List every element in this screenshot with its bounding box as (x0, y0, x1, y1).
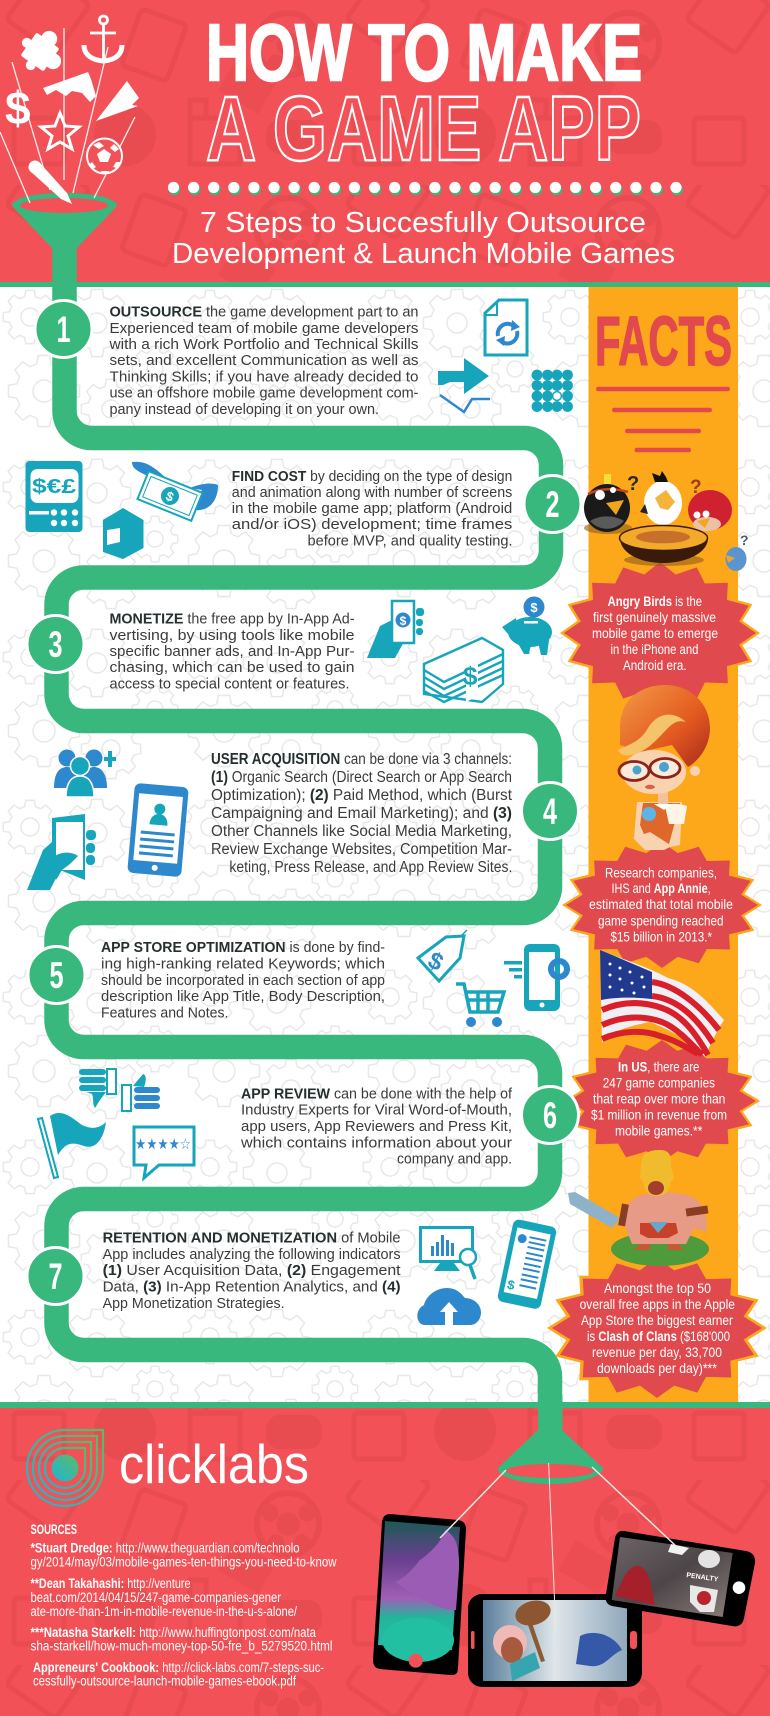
step 7 text: App includes analyzing the following indicators (103, 1247, 401, 1263)
step 1 text: pany instead of developing it on your own. (110, 402, 379, 418)
rays from funnel (0, 28, 135, 203)
sources text: *Stuart Dredge: http://www.theguardian.com/technolo (30, 1540, 300, 1556)
step 5 text: ing high-ranking related Keywords; which (101, 956, 385, 972)
fact 4 text: downloads per day)*** (597, 1360, 717, 1376)
step 7 text: (1) User Acquisition Data, (2) Engagement (103, 1263, 401, 1279)
step 4 text: Review Exchange Websites, Competition Mar- (211, 841, 512, 858)
illustration: angry birds: ? (627, 473, 639, 495)
icon: dot grid (532, 370, 573, 412)
icon: calculator with currencies: $€£ (32, 476, 76, 498)
step 7 number: 7 (48, 1256, 62, 1297)
fact 3 text: In US, there are (618, 1058, 700, 1074)
step 4 number (522, 782, 578, 840)
step 3 number (27, 616, 84, 672)
phone: portrait game screen (373, 1514, 466, 1675)
sources text: cessfully-outsource-launch-mobile-games-ebook.pdf (33, 1674, 296, 1688)
icon: document with refresh (485, 300, 527, 355)
step 3 number: 3 (48, 624, 62, 665)
icon: hand holding bill: $ (400, 614, 407, 628)
step 5 text: Features and Notes. (101, 1006, 228, 1022)
step 4 number: 4 (543, 791, 557, 832)
step 2 number: 2 (546, 484, 560, 525)
step 4 text: USER ACQUISITION can be done via 3 channels: (211, 751, 512, 768)
step 1 number: 1 (56, 309, 70, 350)
step 2 text (232, 469, 513, 550)
subtitle (172, 207, 675, 270)
step 2 text: before MVP, and quality testing. (308, 534, 512, 550)
fact 1 text: mobile game to emerge (592, 625, 718, 641)
fact 3 text: $1 million in revenue from (591, 1106, 727, 1122)
icon: soccer ball (87, 138, 122, 174)
icon: top funnel (12, 193, 117, 248)
illustration: american flag (600, 950, 724, 1057)
icon: paper plane (96, 81, 139, 121)
icon: puzzle piece (11, 20, 73, 83)
icon: price tag (418, 930, 467, 981)
fact 2 text: estimated that total mobile (589, 896, 733, 912)
icon: waving flag (38, 1113, 106, 1178)
step 3 text: chasing, which can be used to gain (110, 660, 354, 676)
subtitle: Development & Launch Mobile Games (172, 238, 675, 270)
panel: footer (0, 1402, 770, 1716)
sources text: sha-starkell/how-much-money-top-50-fre_b_5279520.html (30, 1638, 332, 1654)
title: A GAME APP (206, 78, 641, 180)
icon: money stack: $ (463, 661, 478, 691)
step 4 text: keting, Press Release, and App Review Sites. (229, 859, 512, 876)
icon: safe (103, 508, 144, 559)
facts heading (595, 302, 732, 452)
icon: speech bubble with rating stars (134, 1127, 194, 1178)
title (206, 8, 642, 180)
logo: clicklabs: clicklabs (119, 1433, 309, 1495)
fact 2 text (589, 864, 733, 944)
icon: winged money: $ (164, 488, 177, 505)
icon: phone with profile (127, 783, 189, 877)
step 1 text: use an offshore mobile game development com- (110, 386, 419, 402)
sources text: ***Natasha Starkell: http://www.huffingtonpost.com/nata (30, 1625, 316, 1640)
fact 4 text: is Clash of Clans ($168'000 (587, 1328, 730, 1344)
step 3 text: vertising, by using tools like mobile (110, 628, 354, 644)
step 6 number: 6 (543, 1095, 557, 1136)
phone: tilted football game screen (606, 1531, 755, 1626)
fact 1 text: in the iPhone and (610, 641, 698, 657)
step 2 text: FIND COST by deciding on the type of design (232, 469, 512, 485)
phone: landscape game screen (468, 1594, 642, 1687)
icon: anchor (84, 16, 122, 61)
icon: money stack (424, 638, 503, 702)
step 1 number (35, 300, 92, 358)
star: fact 1 (560, 558, 760, 708)
step 5 number (28, 946, 85, 1004)
icon: star outline (41, 113, 79, 149)
step 3 text: access to special content or features. (110, 676, 350, 692)
fact 2 text: Research companies, (605, 864, 717, 880)
fact 2 text: IHS and App Annie, (612, 880, 711, 896)
step 3 text: MONETIZE the free app by In-App Ad- (110, 612, 355, 628)
icon: bottom funnel (498, 1395, 603, 1484)
icon: cloud upload (417, 1288, 481, 1325)
illustration: red-haired woman (618, 685, 710, 850)
illustration: angry birds: ? (690, 477, 702, 498)
sources text: **Dean Takahashi: http://venture (30, 1576, 190, 1591)
step 3 text (110, 612, 355, 692)
illustration: angry birds (584, 471, 749, 571)
step 5 text: should be incorporated in each section of app (101, 973, 385, 989)
fact 3 text: 247 game companies (603, 1074, 715, 1090)
step 6 number (522, 1086, 578, 1144)
step 2 text: and/or iOS) development; time frames (232, 517, 512, 533)
step 1 text: with a rich Work Portfolio and Technical Skills (108, 337, 418, 353)
connector lines from funnel to phones (440, 1463, 677, 1627)
step 5 text: APP STORE OPTIMIZATION is done by find- (101, 940, 385, 956)
step 4 text: Optimization); (2) Paid Method, which (Burst (211, 787, 513, 804)
sources text: gy/2014/may/03/mobile-games-ten-things-you-need-to-know (30, 1554, 337, 1570)
icon: hand holding phone (27, 814, 96, 890)
step 4 text: Campaigning and Email Marketing); and (3) (211, 805, 512, 822)
step 2 text: and animation along with number of screens (232, 485, 512, 501)
star: fact 4 (547, 1254, 767, 1402)
step 6 text: app users, App Reviewers and Press Kit, (241, 1119, 512, 1135)
fact 3 text: mobile games.** (615, 1122, 703, 1138)
step 1 text (108, 305, 419, 418)
fact 4 text: revenue per day, 33,700 (592, 1344, 722, 1360)
fact 3 text (591, 1058, 727, 1138)
icon: thumbs up (122, 1074, 160, 1111)
icon: winged money (132, 462, 218, 521)
step 4 text: Other Channels like Social Media Marketing, (211, 823, 512, 840)
step 1 text: Experienced team of mobile game developers (110, 321, 418, 337)
subtitle: 7 Steps to Succesfully Outsource (200, 207, 646, 239)
sources text: ate-more-than-1m-in-mobile-revenue-in-the-u-s-alone/ (30, 1604, 297, 1619)
phone: tilted football game screen: PENALTY (686, 1572, 719, 1584)
illustration: angry birds: ? (740, 532, 749, 548)
fact 1 text: Angry Birds is the (608, 593, 702, 609)
panel: header (0, 0, 770, 287)
icon: phone with gear (504, 944, 567, 1011)
panel: facts column (588, 287, 738, 1402)
icon: piggy bank (502, 596, 552, 655)
fact 2 text: game spending reached (598, 912, 724, 928)
white gear background (0, 287, 770, 1402)
fact 1 text (592, 593, 718, 673)
step 6 text: which contains information about your (240, 1136, 512, 1152)
star: fact 2 (562, 838, 762, 972)
step 6 text (240, 1086, 513, 1168)
step 2 text: in the mobile game app; platform (Android (232, 501, 512, 517)
step 5 number: 5 (50, 955, 64, 996)
icon: transfer arrows (438, 358, 490, 412)
icon: people with plus (54, 750, 116, 797)
step 2 number (524, 476, 581, 532)
icon: monitor with chart and magnifier (420, 1228, 476, 1279)
fact 1 text: first genuinely massive (593, 609, 716, 625)
step 7 text: Data, (3) In-App Retention Analytics, and (4) (103, 1280, 401, 1296)
step 6 text: company and app. (397, 1152, 512, 1168)
icon: tablet with report (497, 1219, 557, 1310)
fact 4 text: App Store the biggest earner (581, 1312, 733, 1328)
step 1 text: sets, and excellent Communication as well as (110, 353, 418, 369)
fact 4 text (580, 1280, 735, 1376)
step 6 text: Industry Experts for Viral Word-of-Mouth, (241, 1102, 512, 1118)
green winding path (56, 240, 551, 1440)
step 3 text: specific banner ads, and In-App Pur- (110, 644, 355, 660)
step 7 number (27, 1248, 84, 1304)
sources text (30, 1522, 337, 1688)
sources text: SOURCES (30, 1522, 77, 1537)
icon: pencil (28, 160, 72, 204)
icon: dollar sign: $ (5, 82, 31, 134)
step 5 text (101, 940, 385, 1022)
icon: calculator with currencies (26, 461, 82, 532)
step 4 text: (1) Organic Search (Direct Search or App Search (211, 769, 512, 786)
step 7 text: App Monetization Strategies. (103, 1296, 285, 1312)
sources text: Appreneurs' Cookbook: http://click-labs.com/7-steps-suc- (33, 1660, 324, 1675)
sources text: beat.com/2014/04/15/247-game-companies-gener (30, 1590, 281, 1605)
fact 2 text: $15 billion in 2013.* (610, 928, 712, 944)
icon: hand holding bill (367, 601, 424, 658)
step 7 text (103, 1230, 401, 1312)
step 4 text (211, 751, 513, 876)
icon: price tag: $ (424, 947, 448, 977)
icon: speech bubble with rating stars: ★★★★☆ (135, 1136, 191, 1153)
fact 3 text: that reap over more than (593, 1090, 725, 1106)
fact 1 text: Android era. (623, 657, 687, 673)
star: fact 3 (564, 1036, 760, 1166)
step 6 text: APP REVIEW can be done with the help of (241, 1086, 513, 1102)
step 7 text: RETENTION AND MONETIZATION of Mobile (103, 1230, 401, 1246)
step 1 text: OUTSOURCE the game development part to an (110, 305, 418, 321)
step 1 text: Thinking Skills; if you have already decided to (110, 370, 418, 386)
step 5 text: description like App Title, Body Description, (101, 989, 385, 1005)
fact 4 text: overall free apps in the Apple (580, 1296, 735, 1312)
icon: shopping cart (456, 984, 504, 1027)
icon: thumbs down (79, 1069, 116, 1108)
logo: clicklabs (27, 1430, 309, 1506)
icon: tablet with report: $ (506, 1277, 517, 1293)
icon: pistol (43, 72, 96, 102)
dotted divider (168, 182, 683, 195)
icon: piggy bank: $ (530, 600, 538, 615)
fact 4 text: Amongst the top 50 (604, 1280, 711, 1296)
illustration: clash of clans barbarian (568, 1150, 709, 1266)
